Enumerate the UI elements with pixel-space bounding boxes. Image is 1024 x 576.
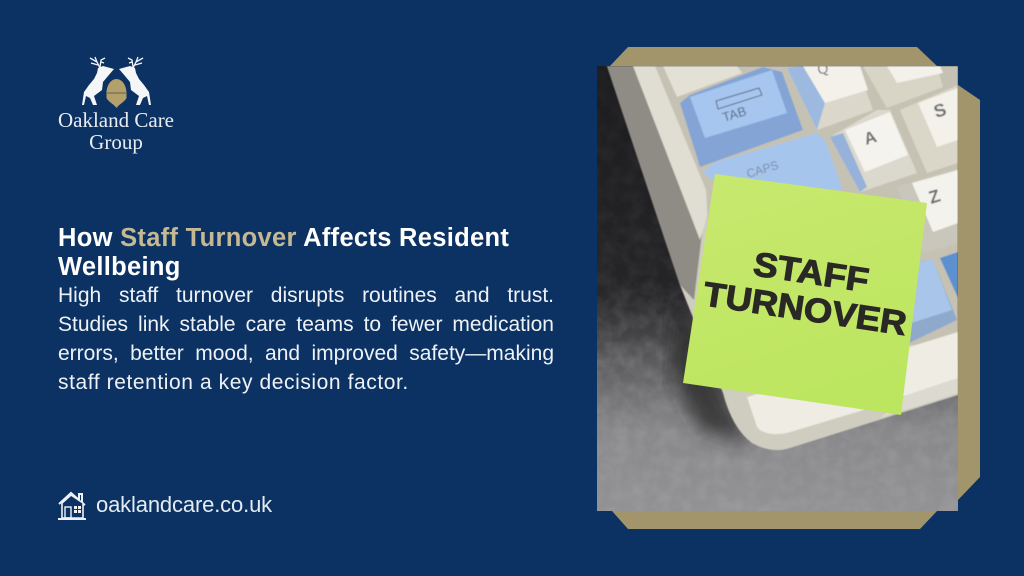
key labels: [716, 59, 949, 208]
body text: Studies link stable care teams to fewer medication: [58, 313, 554, 336]
key labels: S: [931, 99, 949, 122]
website address: oaklandcare.co.uk: [96, 492, 272, 517]
icon: house: [58, 492, 86, 520]
body text: High staff turnover disrupts routines and trust.: [58, 284, 554, 307]
heading: How Staff Turnover Affects Resident: [58, 224, 509, 252]
carpet background: [597, 66, 958, 511]
key labels: TAB: [720, 103, 748, 125]
logo name: [58, 108, 174, 154]
body text: errors, better mood, and improved safety—making: [58, 342, 554, 365]
key labels: A: [862, 127, 879, 149]
body text: staff retention a key decision factor.: [58, 371, 409, 394]
keys: [663, 66, 958, 345]
gold frame: [610, 47, 980, 529]
front plate: [747, 332, 958, 434]
logo: Oakland Care Group: [58, 56, 174, 154]
key labels: Z: [926, 185, 943, 208]
keyboard body: [607, 59, 958, 450]
website link: [58, 492, 272, 520]
heading: Wellbeing: [58, 253, 181, 281]
sticky note text: STAFF: [751, 245, 871, 300]
sticky note: [683, 174, 927, 415]
key labels: CAPS: [745, 158, 780, 181]
sticky note text: TURNOVER: [701, 275, 909, 343]
key labels: Q: [815, 59, 830, 78]
sticky note text: [701, 245, 909, 343]
body text: [58, 284, 554, 394]
logo name: Oakland Care: [58, 108, 174, 132]
heading: [58, 224, 509, 281]
logo emblem: two stags and acorn: [82, 56, 151, 108]
logo name: Group: [89, 130, 143, 154]
photo panel with gold frame: [597, 47, 980, 529]
photo: keyboard with sticky note: [597, 59, 958, 511]
